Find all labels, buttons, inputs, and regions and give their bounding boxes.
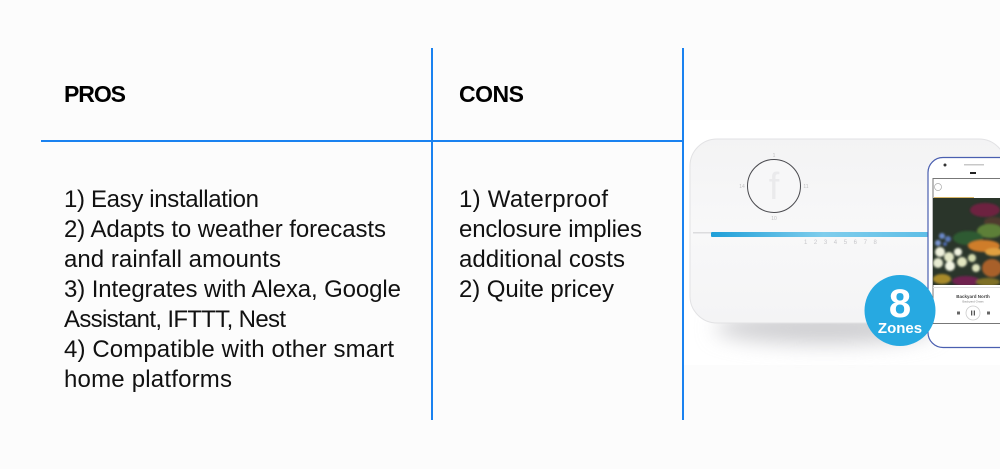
garden photo xyxy=(933,198,1000,286)
pros and cons infographic xyxy=(41,48,1000,420)
text block: cons list: 1) Waterproof xyxy=(459,186,608,213)
text block: cons list: 2) Quite pricey xyxy=(459,276,614,303)
badge: 8 zones: 8 xyxy=(889,282,911,326)
text block: pros list: home platforms xyxy=(64,366,232,393)
heading: cons: CONS xyxy=(459,81,524,107)
text block: cons list: enclosure implies xyxy=(459,216,642,243)
badge: 8 zones xyxy=(864,275,936,346)
text block: pros list: and rainfall amounts xyxy=(64,246,281,273)
text block: cons list xyxy=(459,186,642,303)
dial xyxy=(739,153,809,222)
zone numbers: 12345678 xyxy=(804,240,884,246)
phone xyxy=(928,158,1000,348)
dial: 14 xyxy=(739,184,745,190)
product image: smart sprinkler controller xyxy=(690,139,1000,348)
text block: pros list: 1) Easy installation xyxy=(64,186,259,213)
led light bar xyxy=(711,232,936,237)
text block: pros list: 4) Compatible with other smart xyxy=(64,336,394,363)
badge: 8 zones: Zones xyxy=(878,320,922,337)
track title: Backyard North xyxy=(956,294,990,299)
text block: cons list: additional costs xyxy=(459,246,625,273)
dial: 11 xyxy=(803,184,809,190)
table grid xyxy=(41,48,684,420)
dial: 10 xyxy=(771,216,777,222)
heading: pros: PROS xyxy=(64,81,126,107)
phone: Backyard Grass xyxy=(962,300,984,304)
text block: pros list: Assistant, IFTTT, Nest xyxy=(64,306,286,333)
controller body xyxy=(690,139,1000,323)
dial: f xyxy=(769,166,780,208)
playback controls xyxy=(957,306,990,320)
text block: pros list: 2) Adapts to weather forecasts xyxy=(64,216,386,243)
dial: 1 xyxy=(773,153,776,159)
text block: pros list xyxy=(64,186,401,393)
text block: pros list: 3) Integrates with Alexa, Google xyxy=(64,276,401,303)
